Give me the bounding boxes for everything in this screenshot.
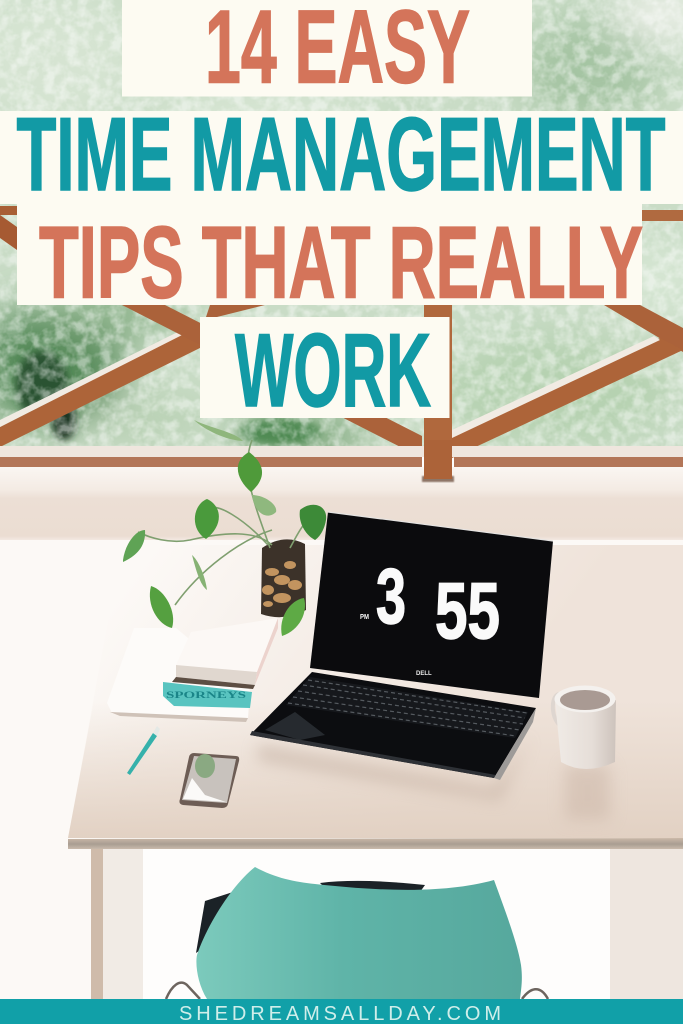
plant stems (138, 440, 312, 605)
stack of books and papers (107, 618, 278, 722)
stack of books and papers: SPORNEYS (166, 690, 246, 700)
magazine (163, 682, 252, 708)
chair dark back (196, 892, 233, 953)
title band: 14 easy (122, 0, 532, 106)
laptop screen (310, 512, 553, 698)
pen (127, 726, 160, 775)
plant (123, 420, 326, 636)
railing (0, 206, 683, 480)
desk top (0, 540, 683, 1000)
mug (553, 686, 616, 769)
chair (166, 867, 548, 999)
desk front edge (68, 838, 683, 849)
phone (179, 753, 239, 808)
plant jar (261, 539, 306, 617)
ledge and wall (0, 467, 683, 542)
clock: 3 55: 55 (435, 566, 500, 655)
clock: 3 55 (360, 552, 500, 655)
laptop (250, 512, 553, 780)
laptop base (250, 672, 536, 778)
laptop brand: DELL (416, 671, 432, 677)
desk legs (91, 849, 683, 999)
book (176, 618, 278, 672)
title band: work (200, 313, 450, 429)
footer bar (0, 999, 683, 1024)
clock: 3 55: PM (360, 614, 369, 621)
laptop keyboard (286, 677, 528, 738)
title band: work: WORK (235, 313, 431, 429)
clock: 3 55: 3 (376, 552, 406, 640)
chair seat (196, 867, 522, 999)
shadows under laptop and mug (258, 735, 610, 820)
chair wire legs (166, 983, 548, 999)
plant leaves (123, 420, 326, 636)
